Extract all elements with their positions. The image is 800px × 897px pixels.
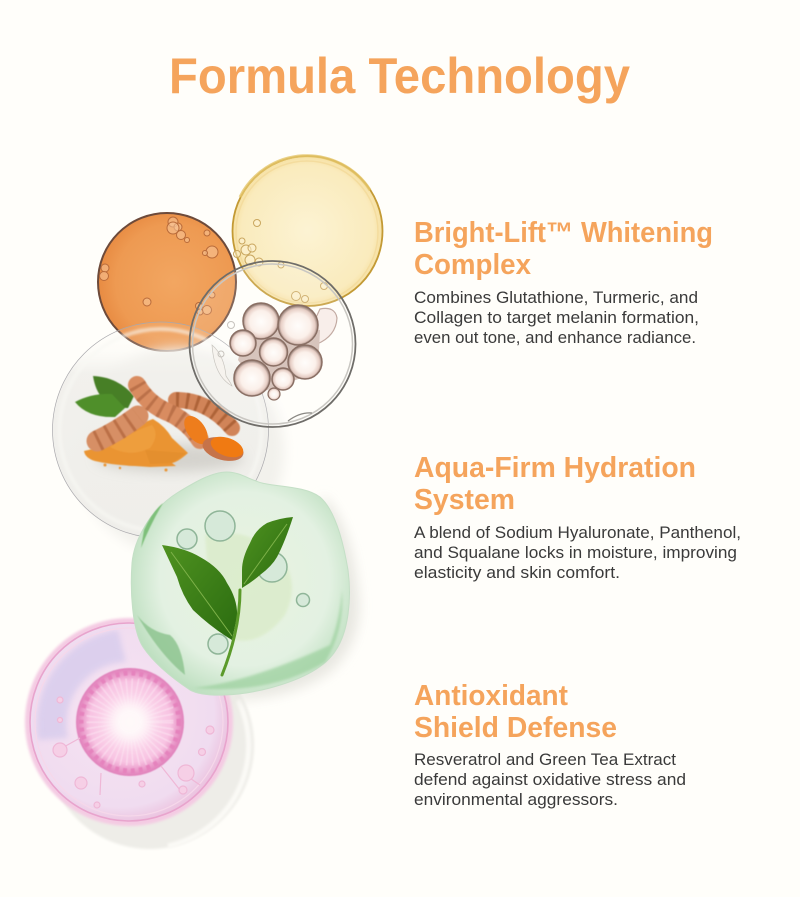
illustration: ingredient dishes [25, 156, 382, 849]
section: Aqua-Firm Hydration System [414, 452, 741, 582]
heading: Shield Defense [414, 712, 617, 744]
section: Bright-Lift Whitening Complex [414, 217, 713, 347]
description [414, 524, 741, 582]
description: environmental aggressors. [414, 791, 618, 809]
heading: System [414, 484, 515, 516]
heading: Bright-Lift™ Whitening [414, 217, 713, 249]
bubble cluster [230, 303, 337, 400]
plate: turmeric [52, 322, 268, 538]
section: Antioxidant Shield Defense [414, 680, 686, 809]
description: Resveratrol and Green Tea Extract [414, 751, 676, 769]
dish: clear with bubbles [190, 261, 356, 427]
leaves: turmeric [75, 376, 134, 417]
heading: Complex [414, 249, 531, 281]
description: Combines Glutathione, Turmeric, and [414, 289, 698, 307]
burst [76, 668, 184, 776]
description: Collagen to target melanin formation, [414, 309, 699, 327]
dish: orange serum [98, 213, 236, 351]
description: even out tone, and enhance radiance. [414, 329, 696, 347]
heading [414, 452, 696, 516]
slices: turmeric [179, 412, 246, 465]
description [414, 289, 699, 347]
blob: green gel [131, 472, 350, 695]
shadow: turmeric plate [76, 348, 284, 556]
dish: pink antioxidant [25, 618, 233, 826]
description: A blend of Sodium Hyaluronate, Panthenol, [414, 524, 741, 542]
heading [414, 680, 617, 744]
large droplet [205, 533, 292, 641]
dish: yellow oil [232, 156, 382, 306]
description [414, 751, 686, 809]
heading: Aqua-Firm Hydration [414, 452, 696, 484]
shadow: pink dish [46, 641, 254, 849]
heading [414, 217, 713, 281]
description: defend against oxidative stress and [414, 771, 686, 789]
molecules [53, 697, 214, 808]
rhizomes: turmeric [97, 385, 232, 441]
shadow: green blob [225, 495, 359, 700]
tea leaves [162, 517, 293, 675]
heading: Antioxidant [414, 680, 568, 712]
powder: turmeric [84, 419, 188, 472]
title: Formula Technology [169, 48, 630, 104]
description: elasticity and skin comfort. [414, 564, 620, 582]
droplets [177, 511, 310, 654]
description: and Squalane locks in moisture, improving [414, 544, 737, 562]
